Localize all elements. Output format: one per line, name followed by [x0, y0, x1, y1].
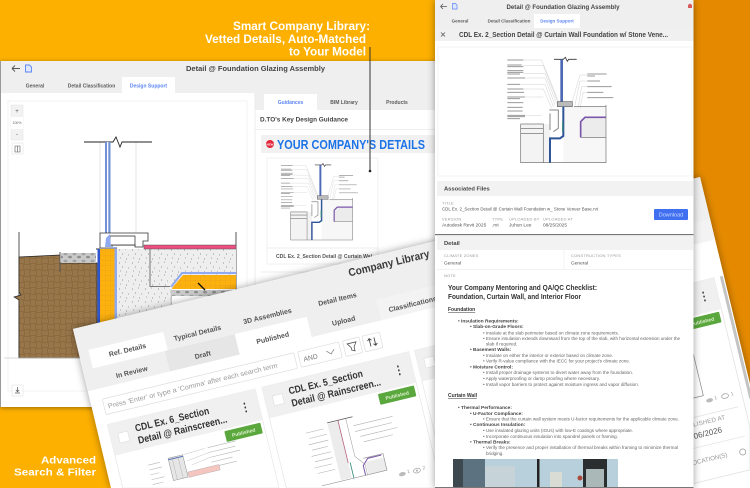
note: mentoring and QA/QC checklist: slab if required. — [486, 342, 517, 346]
divider band: your company's details: YOUR COMPANY'S DETAILS — [277, 138, 425, 152]
associated files: CDL Ex. 2_Section Detail @ Curtain Wall Foundation w_ Stone Veneer Base.rvt — [442, 206, 599, 212]
main tabs: General — [26, 84, 45, 90]
background: amber left — [0, 0, 600, 488]
panel tabs: Detail Classification — [488, 18, 531, 24]
note: mentoring and QA/QC checklist: • Apply waterproofing or damp proofing where necessary. — [483, 376, 600, 381]
card header: CDL Ex. 6: Published — [231, 428, 256, 439]
guidance card: CDL Ex. 2 — [267, 158, 378, 264]
card footer: published at and locations — [672, 407, 749, 469]
zoom controls: + — [15, 109, 19, 115]
icon: sort — [362, 332, 383, 352]
library tabs row 2 — [83, 219, 715, 391]
associated files: VERSION — [442, 216, 461, 222]
main tabs — [1, 76, 437, 93]
AND dropdown: AND — [303, 353, 319, 364]
associated files: TITLE — [442, 200, 454, 206]
card stats: fourth card: 1 — [730, 391, 735, 398]
library tabs row 2: Upload — [331, 315, 356, 328]
label: advanced search and filter: Advanced — [41, 454, 96, 466]
headline: smart company library — [205, 21, 370, 58]
note: mentoring and QA/QC checklist: • Verify the presence and proper installation of thermal breaks within framing to minimize thermal — [483, 445, 678, 450]
note: mentoring and QA/QC checklist: • Continuous Insulation: — [470, 422, 526, 428]
associated files: TYPE — [492, 216, 503, 222]
card header: CDL Ex. 5: CDL Ex. 5_Section — [288, 369, 364, 397]
note: mentoring and QA/QC checklist: • Ensure that the curtain wall system meets U-factor requirements for the applicable climate zone. — [483, 416, 679, 422]
associated files: Autodesk Revit 2025 — [442, 222, 487, 228]
associated files: Associated Files — [444, 186, 490, 192]
guidance card: CDL Ex. 2: CDL Ex. 2_Section Detail @ Curtain Wal — [276, 254, 373, 260]
panel header bar: Detail @ Foundation Glazing Assembly — [186, 64, 326, 73]
divider band: your company's details — [255, 129, 437, 153]
arrow: headline to company details — [369, 47, 371, 172]
panel tabs: General — [452, 18, 468, 24]
library tabs row 1: Detail Items — [318, 292, 358, 308]
note: mentoring and QA/QC checklist: • Use insulated glazing units (IGUs) with low-E coatings where appropriate. — [483, 428, 633, 433]
card: CDL Ex. 6 — [107, 389, 279, 488]
note: mentoring and QA/QC checklist: • Slab-on-Grade Floors: — [470, 324, 524, 330]
zoom controls: - — [16, 132, 18, 138]
search box — [102, 353, 298, 415]
library tabs row 2: Classifications — [388, 296, 438, 314]
note: mentoring and QA/QC checklist: • Incorporate continuous insulation into spandrel panels or framing. — [483, 434, 618, 439]
library tabs row 1: Ref. Details — [108, 343, 147, 359]
panel: design support detail — [435, 0, 694, 488]
associated files: Juhun Lee — [509, 222, 532, 228]
site photo — [453, 459, 618, 487]
panel tabs — [435, 13, 694, 28]
card stats — [398, 465, 426, 477]
card: CDL Ex. 5 — [262, 352, 442, 488]
card header: partial third card — [415, 315, 569, 381]
main tabs: Design Support — [130, 84, 167, 90]
note: mentoring and QA/QC checklist: • Ensure insulation extends downward from the top of the slab, with horizontal extension under the — [483, 336, 680, 341]
label: advanced search and filter: Search & Filter — [14, 466, 96, 478]
zoom controls: 100% — [13, 121, 21, 125]
detail section: General — [444, 260, 461, 266]
card header: partial fourth card — [567, 278, 725, 357]
library tabs row 2: Draft — [194, 350, 212, 361]
card: partial fourth card — [567, 278, 750, 488]
card footer: published at and locations: 01/06/2026 — [682, 425, 723, 444]
headline: smart company library: Smart Company Library: — [233, 21, 370, 33]
library tabs row 1 — [79, 201, 710, 372]
panel edge scrollbar — [720, 276, 750, 399]
library tabs row 2: Published — [256, 331, 290, 346]
library tabs row 1: Typical Details — [173, 325, 222, 343]
panel: main detail view — [0, 61, 437, 407]
note: mentoring and QA/QC checklist: • Insulate on either the interior or exterior based on climate zone. — [483, 353, 613, 358]
search box: Press 'Enter' or type a 'Comma' after each search term — [107, 362, 279, 410]
card footer: published at and locations: PUBLISHED AT — [680, 414, 726, 432]
card header: CDL Ex. 5: Detail @ Rainscreen... — [291, 377, 382, 410]
card header: CDL Ex. 6: CDL Ex. 6_Section — [134, 406, 210, 435]
detail section — [435, 234, 694, 278]
panel header: Detail @ Foundation Glazing Assembly — [506, 4, 620, 11]
library tabs row 2: In Review — [115, 366, 149, 380]
note: mentoring and QA/QC checklist: Curtain Wall — [448, 393, 478, 399]
zoom controls — [11, 105, 23, 154]
AND dropdown — [298, 342, 342, 367]
card header: CDL Ex. 6: Detail @ Rainscreen... — [137, 414, 229, 447]
note: mentoring and QA/QC checklist: Your Company Mentoring and QA/QC Checklist: — [448, 283, 597, 292]
card stats: 2 — [422, 465, 426, 472]
drawing: rainscreen detail 6 — [147, 440, 244, 486]
detail section: General — [571, 260, 588, 266]
note: mentoring and QA/QC checklist: • Thermal Performance: — [458, 405, 512, 411]
foundation section drawing — [4, 137, 236, 358]
note: mentoring and QA/QC checklist: • Insulation Requirements: — [458, 318, 519, 324]
card header: CDL Ex. 5: Published — [385, 390, 410, 402]
note: mentoring and QA/QC checklist: • Moisture Control: — [470, 364, 513, 370]
note: mentoring and QA/QC checklist: bridging. — [486, 451, 504, 456]
card header: CDL Ex. 5 — [262, 352, 419, 431]
associated files: 08/25/2025 — [543, 222, 567, 228]
panel header — [435, 0, 694, 13]
card header: CDL Ex. 6 — [107, 389, 266, 468]
note: mentoring and QA/QC checklist: • Verify R-value compliance with the IECC for your project's climate zone. — [483, 358, 630, 364]
background: dark orange right — [600, 0, 750, 488]
guidance sub tabs: Guidances — [278, 100, 303, 106]
note: mentoring and QA/QC checklist — [448, 283, 680, 456]
guidance sub tabs: Products — [386, 100, 408, 106]
section detail drawing — [438, 47, 692, 176]
headline: smart company library: to Your Model — [289, 46, 366, 58]
card stats: 1 — [406, 469, 411, 475]
detail section: Detail — [444, 241, 460, 247]
note: mentoring and QA/QC checklist: • U-Factor Compliance: — [470, 411, 523, 417]
card header: partial fourth card: Published — [690, 317, 715, 328]
download button: Download — [659, 212, 683, 218]
card footer: published at and locations: LOCATION(S) — [688, 452, 728, 468]
panel tabs: Design Support — [540, 18, 574, 24]
section drawing pane — [4, 101, 247, 391]
download button — [654, 209, 688, 220]
note: mentoring and QA/QC checklist: • Install proper drainage systems to divert water away from the foundation. — [483, 370, 633, 375]
note: mentoring and QA/QC checklist: • Thermal Breaks: — [470, 440, 511, 446]
guidance heading: D.TO's Key Design Guidance — [260, 118, 349, 124]
note: mentoring and QA/QC checklist: Foundation, Curtain Wall, and Interior Floor — [448, 292, 581, 301]
guidance sub tabs — [255, 93, 437, 110]
file title bar — [435, 28, 694, 41]
headline: smart company library: Vetted Details, Auto-Matched — [205, 34, 366, 46]
associated files: UPLOADED BY — [509, 216, 540, 222]
library title bar: Company Library — [347, 248, 432, 279]
note: mentoring and QA/QC checklist: Foundation — [448, 307, 475, 313]
library tabs row 1: 3D Assemblies — [243, 308, 293, 326]
main tabs: Detail Classification — [68, 84, 115, 90]
associated files — [437, 181, 693, 228]
associated files: UPLOADED AT — [543, 216, 573, 222]
guidance sub tabs: BIM Library — [330, 100, 358, 106]
divider band: your company's details: NEW — [266, 142, 274, 146]
card: partial third card — [414, 315, 603, 488]
detail section: CONSTRUCTION TYPES — [571, 253, 621, 258]
drawing: rainscreen detail 5 — [305, 407, 406, 487]
icon: download — [12, 385, 23, 396]
associated files: .rvt — [492, 222, 499, 228]
label: advanced search and filter — [14, 454, 96, 478]
note: mentoring and QA/QC checklist: • Install vapor barriers to protect against moisture ingress and vapor diffusion. — [483, 382, 639, 387]
note: mentoring and QA/QC checklist: • Insulate at the slab perimeter based on climate zone requirements. — [483, 330, 619, 335]
card stats: fourth card: 1 — [714, 395, 718, 402]
panel: company library (tilted) — [73, 177, 750, 488]
card stats: fourth card — [666, 342, 735, 410]
detail section: NOTE — [444, 273, 456, 278]
icon: filter — [342, 337, 363, 357]
detail section: CLIMATE ZONES — [444, 253, 479, 258]
panel header bar — [1, 61, 437, 76]
note: mentoring and QA/QC checklist: • Basement Walls: — [470, 347, 512, 353]
file title bar: CDL Ex. 2_Section Detail @ Curtain Wall Foundation w/ Stone Vene... — [459, 32, 668, 39]
